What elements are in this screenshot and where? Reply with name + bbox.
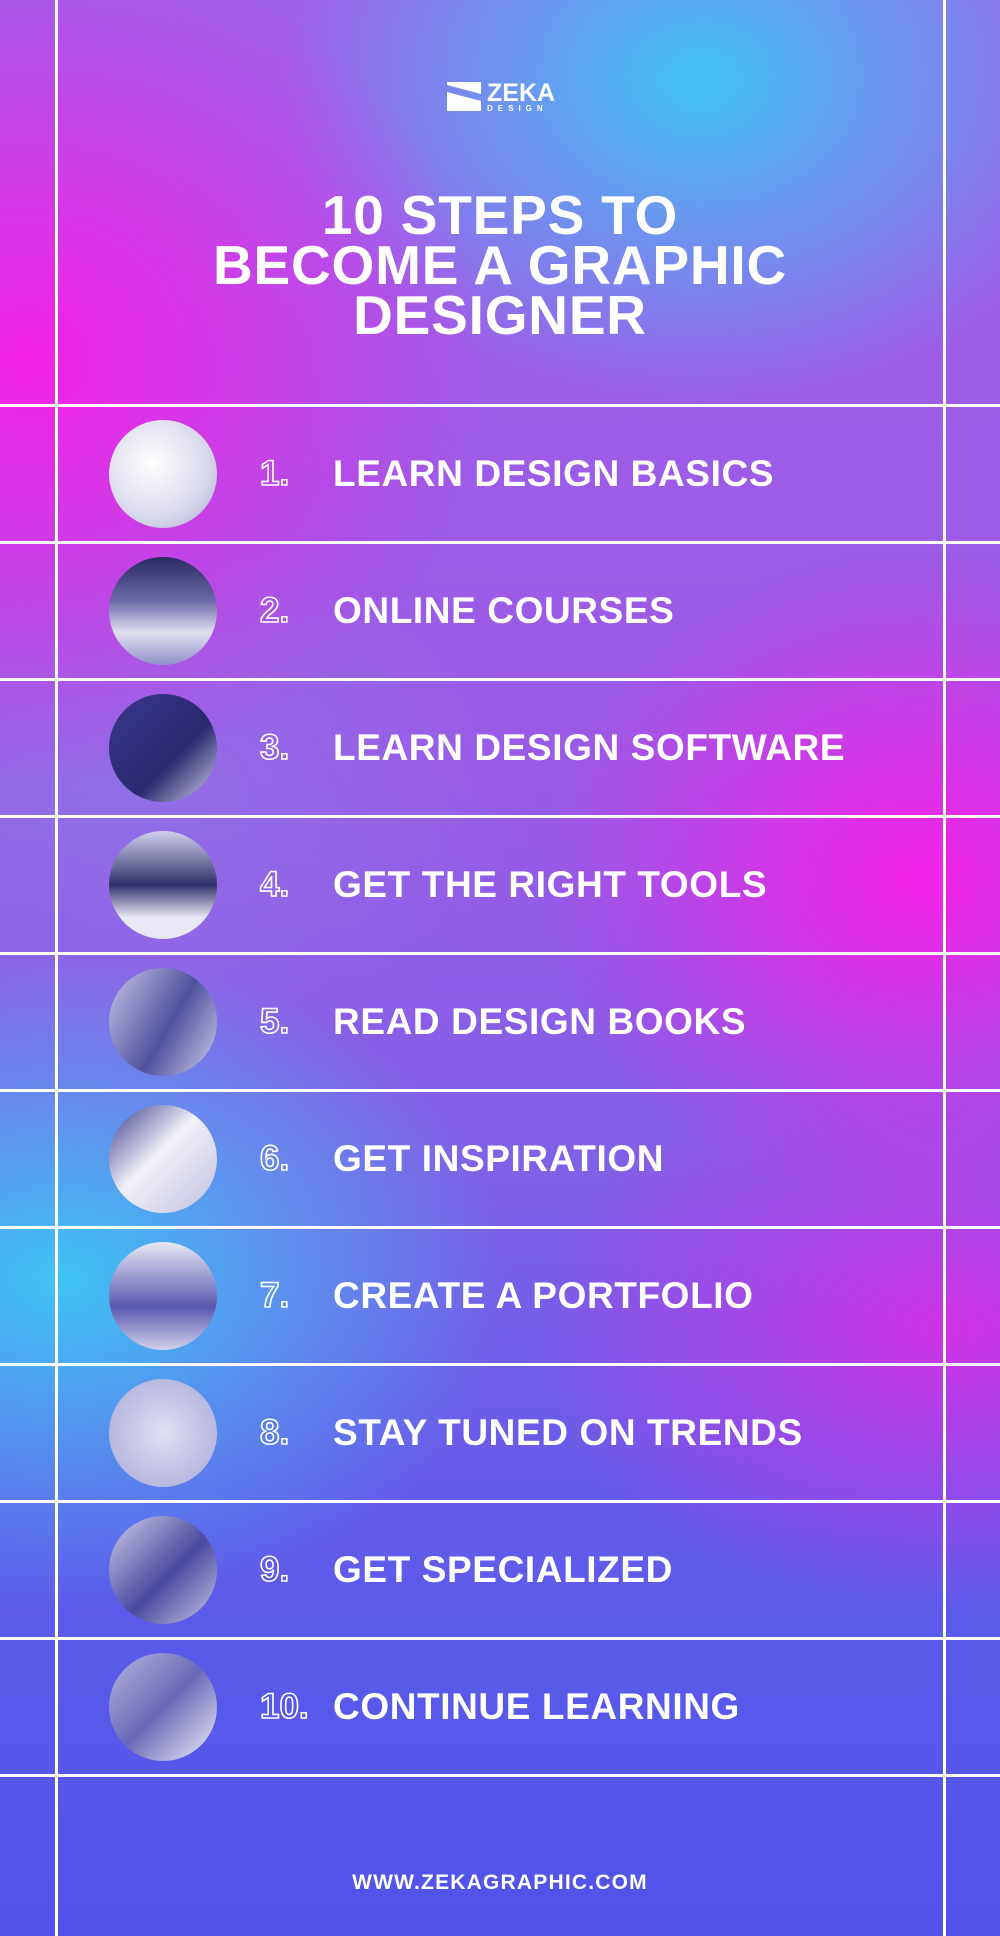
- step 4: GET THE RIGHT TOOLS: [333, 864, 767, 905]
- step 5: [109, 968, 746, 1076]
- step 10: [109, 1653, 740, 1761]
- step 8: STAY TUNED ON TRENDS: [333, 1412, 803, 1453]
- step 3: LEARN DESIGN SOFTWARE: [333, 727, 845, 768]
- step 3: [109, 694, 845, 802]
- step 1: LEARN DESIGN BASICS: [333, 453, 774, 494]
- step 2: [109, 557, 674, 665]
- step 6: [109, 1105, 664, 1213]
- step 10: CONTINUE LEARNING: [333, 1686, 740, 1727]
- title: BECOME A GRAPHIC: [213, 234, 787, 296]
- step 8: [109, 1379, 803, 1487]
- step 4: [109, 831, 767, 939]
- step 9: GET SPECIALIZED: [333, 1549, 673, 1590]
- step 2: ONLINE COURSES: [333, 590, 674, 631]
- step 9: [109, 1516, 673, 1624]
- step 7: CREATE A PORTFOLIO: [333, 1275, 754, 1316]
- title: 10 STEPS TO: [322, 184, 678, 246]
- title: [213, 184, 787, 346]
- icon: logo mark: [447, 82, 481, 111]
- footer url: WWW.ZEKAGRAPHIC.COM: [352, 1871, 648, 1894]
- step 6: GET INSPIRATION: [333, 1138, 664, 1179]
- step 7: [109, 1242, 754, 1350]
- step 5: READ DESIGN BOOKS: [333, 1001, 746, 1042]
- logo: [447, 79, 555, 113]
- logo text: DESIGN: [487, 104, 548, 113]
- step 1: [109, 420, 774, 528]
- logo text: ZEKA: [487, 79, 555, 107]
- title: DESIGNER: [353, 284, 647, 346]
